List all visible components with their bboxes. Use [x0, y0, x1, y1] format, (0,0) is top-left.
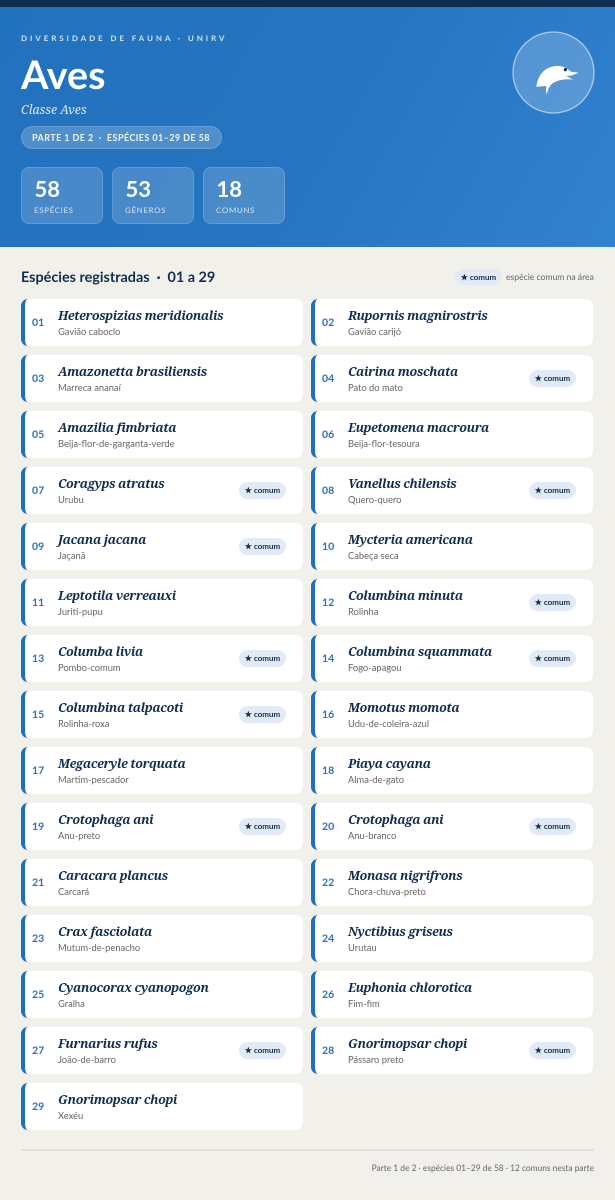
card 04: [311, 355, 593, 402]
card 09: 09: [32, 541, 44, 553]
card 10: Mycteria americana: [348, 531, 473, 548]
card 04: 04: [322, 373, 334, 385]
card 07: [21, 467, 303, 514]
card 12: ★ comum: [535, 597, 570, 607]
card 07: Coragyps atratus: [58, 475, 164, 492]
card 22: Chora-chuva-preto: [348, 886, 426, 896]
stat: gêneros: 53: [126, 174, 151, 202]
card 09: [21, 523, 303, 570]
card 05: [21, 411, 303, 458]
stat: gêneros: GÊNEROS: [125, 205, 166, 215]
legend: [455, 269, 594, 285]
card 10: 10: [322, 541, 334, 553]
card 01: Heterospizias meridionalis: [58, 307, 223, 324]
card 19: [21, 803, 303, 850]
card 04: ★ comum: [535, 373, 570, 383]
stat: espécies: [21, 167, 103, 224]
card 06: Beija-flor-tesoura: [348, 438, 420, 448]
card 05: Beija-flor-de-garganta-verde: [58, 438, 175, 448]
card 08: Quero-quero: [348, 494, 401, 504]
card 01: Gavião caboclo: [58, 326, 120, 336]
card 11: [21, 579, 303, 626]
part pill: [21, 126, 222, 149]
icon: bird badge: [512, 31, 595, 114]
card 28: ★ comum: [535, 1045, 570, 1055]
card 03: 03: [32, 373, 44, 385]
stat: espécies: 58: [34, 174, 60, 202]
legend badge: ★ comum: [461, 272, 496, 282]
card 11: 11: [32, 597, 44, 609]
card 26: [311, 971, 593, 1018]
card 25: Gralha: [58, 998, 85, 1008]
card 19: 19: [32, 821, 44, 833]
card 11: Juriti-pupu: [58, 606, 103, 616]
card 10: Cabeça seca: [348, 550, 399, 560]
card 21: [21, 859, 303, 906]
card 14: ★ comum: [535, 653, 570, 663]
card 27: [21, 1027, 303, 1074]
card 03: Marreca ananaí: [58, 382, 121, 392]
card 25: 25: [32, 989, 44, 1001]
card 15: 15: [32, 709, 44, 721]
card 24: [311, 915, 593, 962]
card 23: Mutum-de-penacho: [58, 942, 140, 952]
card 24: Nyctibius griseus: [348, 923, 453, 940]
card 20: [311, 803, 593, 850]
card 24: Urutau: [348, 942, 377, 952]
card 20: Crotophaga ani: [348, 811, 443, 828]
card 14: [311, 635, 593, 682]
card 29: [21, 1083, 303, 1130]
card 29: Xexéu: [58, 1110, 83, 1120]
card 06: Eupetomena macroura: [348, 419, 489, 436]
card 16: Momotus momota: [348, 699, 459, 716]
card 17: [21, 747, 303, 794]
card 10: [311, 523, 593, 570]
card 03: [21, 355, 303, 402]
card 08: [311, 467, 593, 514]
card 29: 29: [32, 1101, 44, 1113]
legend badge: [455, 269, 502, 285]
card 28: Pássaro preto: [348, 1054, 404, 1064]
card 09: Jaçanã: [58, 550, 85, 560]
card 20: ★ comum: [535, 821, 570, 831]
card 17: Martim-pescador: [58, 774, 129, 784]
card 22: 22: [322, 877, 334, 889]
card 14: Columbina squammata: [348, 643, 492, 660]
card 25: [21, 971, 303, 1018]
card 17: 17: [32, 765, 44, 777]
card 13: Columba livia: [58, 643, 143, 660]
card 13: [21, 635, 303, 682]
stat: comuns: [203, 167, 285, 224]
card 19: ★ comum: [245, 821, 280, 831]
card 13: Pombo-comum: [58, 662, 121, 672]
card 18: 18: [322, 765, 334, 777]
card 15: Rolinha-roxa: [58, 718, 109, 728]
card 12: [311, 579, 593, 626]
stat: gêneros: [112, 167, 194, 224]
card 16: Udu-de-coleira-azul: [348, 718, 429, 728]
part pill: PARTE 1 DE 2 · ESPÉCIES 01–29 DE 58: [32, 132, 210, 143]
title: Aves: [21, 51, 105, 98]
card 05: 05: [32, 429, 44, 441]
card 23: 23: [32, 933, 44, 945]
card 03: Amazonetta brasiliensis: [58, 363, 207, 380]
card 14: Fogo-apagou: [348, 662, 402, 672]
card 25: Cyanocorax cyanopogon: [58, 979, 209, 996]
card 20: 20: [322, 821, 334, 833]
card 15: [21, 691, 303, 738]
card 26: Euphonia chlorotica: [348, 979, 472, 996]
card 09: ★ comum: [245, 541, 280, 551]
card 02: [311, 299, 593, 346]
card 02: Rupornis magnirostris: [348, 307, 487, 324]
card 21: Carcará: [58, 886, 89, 896]
card 19: Crotophaga ani: [58, 811, 153, 828]
subtitle: Classe Aves: [21, 101, 87, 118]
card 26: 26: [322, 989, 334, 1001]
card 23: Crax fasciolata: [58, 923, 152, 940]
card 24: 24: [322, 933, 334, 945]
card 23: [21, 915, 303, 962]
card 15: Columbina talpacoti: [58, 699, 183, 716]
card 28: 28: [322, 1045, 334, 1057]
card 02: 02: [322, 317, 334, 329]
card 20: Anu-branco: [348, 830, 396, 840]
card 08: Vanellus chilensis: [348, 475, 456, 492]
card 27: Furnarius rufus: [58, 1035, 157, 1052]
card 09: Jacana jacana: [58, 531, 146, 548]
card 13: ★ comum: [245, 653, 280, 663]
card 27: João-de-barro: [58, 1054, 116, 1064]
eyebrow label: DIVERSIDADE DE FAUNA · UNIRV: [21, 33, 227, 43]
stat: comuns: COMUNS: [216, 205, 255, 215]
card 18: [311, 747, 593, 794]
card 29: Gnorimopsar chopi: [58, 1091, 177, 1108]
card 16: [311, 691, 593, 738]
card 28: [311, 1027, 593, 1074]
stat: espécies: ESPÉCIES: [34, 205, 74, 215]
card 08: ★ comum: [535, 485, 570, 495]
card 27: ★ comum: [245, 1045, 280, 1055]
card 04: Pato do mato: [348, 382, 403, 392]
card 01: 01: [32, 317, 44, 329]
card 18: Piaya cayana: [348, 755, 431, 772]
card 11: Leptotila verreauxi: [58, 587, 176, 604]
card 21: Caracara plancus: [58, 867, 168, 884]
card 22: Monasa nigrifrons: [348, 867, 462, 884]
section heading: Espécies registradas · 01 a 29: [21, 269, 215, 286]
card 26: Fim-fim: [348, 998, 380, 1008]
card 12: Columbina minuta: [348, 587, 463, 604]
card 06: [311, 411, 593, 458]
header band: [0, 0, 615, 247]
card 07: ★ comum: [245, 485, 280, 495]
card 08: 08: [322, 485, 334, 497]
stat: comuns: 18: [216, 174, 242, 202]
card 13: 13: [32, 653, 44, 665]
card 22: [311, 859, 593, 906]
card 27: 27: [32, 1045, 44, 1057]
card 18: Alma-de-gato: [348, 774, 404, 784]
footer note: Parte 1 de 2 · espécies 01–29 de 58 · 12 comuns nesta parte: [372, 1163, 594, 1173]
card 21: 21: [32, 877, 44, 889]
card 17: Megaceryle torquata: [58, 755, 185, 772]
card 01: [21, 299, 303, 346]
card 02: Gavião carijó: [348, 326, 401, 336]
card 28: Gnorimopsar chopi: [348, 1035, 467, 1052]
card 04: Cairina moschata: [348, 363, 458, 380]
card 19: Anu-preto: [58, 830, 100, 840]
card 12: Rolinha: [348, 606, 378, 616]
card 07: 07: [32, 485, 44, 497]
card 07: Urubu: [58, 494, 84, 504]
legend text: espécie comum na área: [506, 272, 594, 282]
card 06: 06: [322, 429, 334, 441]
card 14: 14: [322, 653, 334, 665]
card 15: ★ comum: [245, 709, 280, 719]
card 05: Amazilia fimbriata: [58, 419, 176, 436]
card 16: 16: [322, 709, 334, 721]
card 12: 12: [322, 597, 334, 609]
